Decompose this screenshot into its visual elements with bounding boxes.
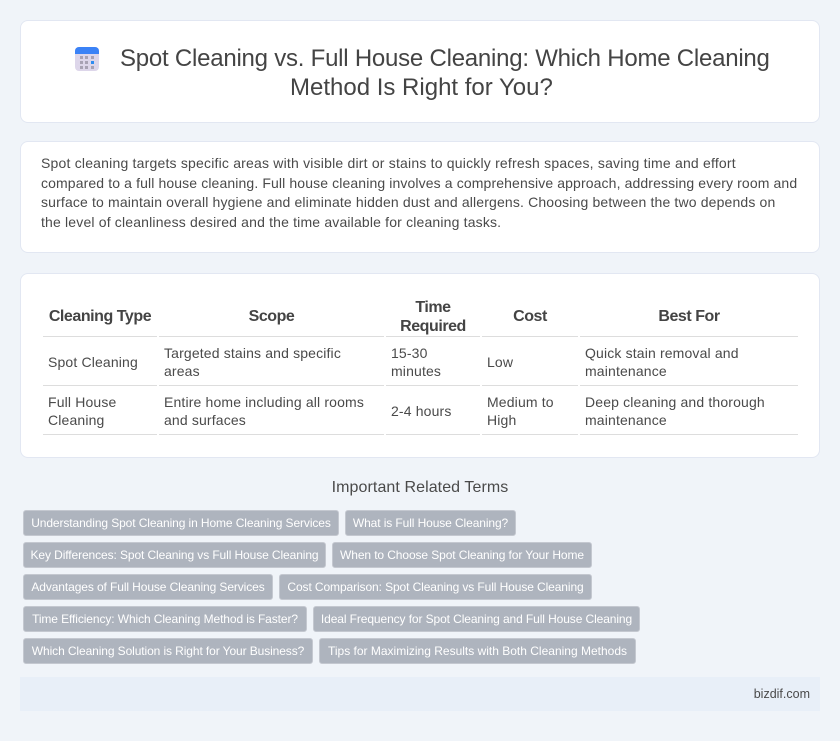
title: Method Is Right for You? [290, 74, 553, 101]
tag list: related terms [23, 510, 640, 664]
table row: spot cleaning: areas [164, 363, 200, 379]
tag list: related terms: What is Full House Cleaning? [353, 516, 508, 530]
text block: introduction [41, 155, 797, 230]
table header row: Time [415, 299, 451, 316]
tag list: related terms: Time Efficiency: Which Cleaning Method is Faster? [32, 612, 298, 626]
text block: introduction: Spot cleaning targets specific areas with visible dirt or stains to quickly refresh spaces, saving time and effort [41, 155, 736, 171]
table row: spot cleaning: maintenance [585, 363, 667, 379]
tag list: related terms: Cost Comparison: Spot Cleaning vs Full House Cleaning [287, 580, 584, 594]
footer source text: bizdif.com [754, 687, 810, 701]
tag list: related terms: Understanding Spot Cleaning in Home Cleaning Services [31, 516, 331, 530]
table row: full house cleaning: Medium to [487, 394, 554, 410]
icon: calendar [75, 47, 99, 71]
table row: full house cleaning: Deep cleaning and thorough [585, 394, 765, 410]
text block: introduction: compared to a full house cleaning. Full house cleaning involves a comprehensive approach, addressing every room and [41, 175, 797, 191]
tag list: related terms: Key Differences: Spot Cleaning vs Full House Cleaning [31, 548, 318, 562]
table row: full house cleaning: Entire home including all rooms [164, 394, 364, 410]
text block: introduction: the level of cleanliness desired and the time available for cleaning tasks. [41, 214, 501, 230]
heading: related terms: Important Related Terms [332, 479, 508, 496]
tag list: related terms: Tips for Maximizing Results with Both Cleaning Methods [328, 644, 627, 658]
table row: spot cleaning: Targeted stains and specific [164, 345, 341, 361]
tag list: related terms: Which Cleaning Solution is Right for Your Business? [32, 644, 304, 658]
header card [20, 20, 820, 123]
table row: full house cleaning: Full House [48, 394, 116, 410]
table header row: Best For [658, 308, 720, 325]
table row: full house cleaning: High [487, 412, 516, 428]
panel: comparison table [20, 273, 820, 458]
table row: full house cleaning: Cleaning [48, 412, 104, 428]
table row: full house cleaning: maintenance [585, 412, 667, 428]
title [120, 45, 770, 101]
tag list: related terms: When to Choose Spot Cleaning for Your Home [340, 548, 584, 562]
table row: spot cleaning: minutes [391, 363, 441, 379]
text block: introduction: surface to maintain overall hygiene and eliminate hidden dust and allergens. Choosing between the two depends on [41, 194, 775, 210]
table row: full house cleaning: and surfaces [164, 412, 246, 428]
title: Spot Cleaning vs. Full House Cleaning: Which Home Cleaning [120, 45, 770, 72]
table row: full house cleaning [48, 394, 765, 428]
table header row [49, 299, 720, 335]
table row: spot cleaning: Quick stain removal and [585, 345, 739, 361]
table row: spot cleaning: 15-30 [391, 345, 428, 361]
table header row: Required [400, 318, 466, 335]
panel: introduction [20, 141, 820, 253]
table row: spot cleaning: Spot Cleaning [48, 354, 138, 370]
table row: spot cleaning [48, 345, 739, 379]
table row: spot cleaning: Low [487, 354, 513, 370]
table row: full house cleaning: 2-4 hours [391, 403, 452, 419]
footer [20, 677, 820, 711]
tag list: related terms: Advantages of Full House Cleaning Services [31, 580, 265, 594]
tag list: related terms: Ideal Frequency for Spot Cleaning and Full House Cleaning [321, 612, 632, 626]
table header row: Scope [249, 308, 294, 325]
table header row: Cleaning Type [49, 308, 151, 325]
table header row: Cost [513, 308, 547, 325]
